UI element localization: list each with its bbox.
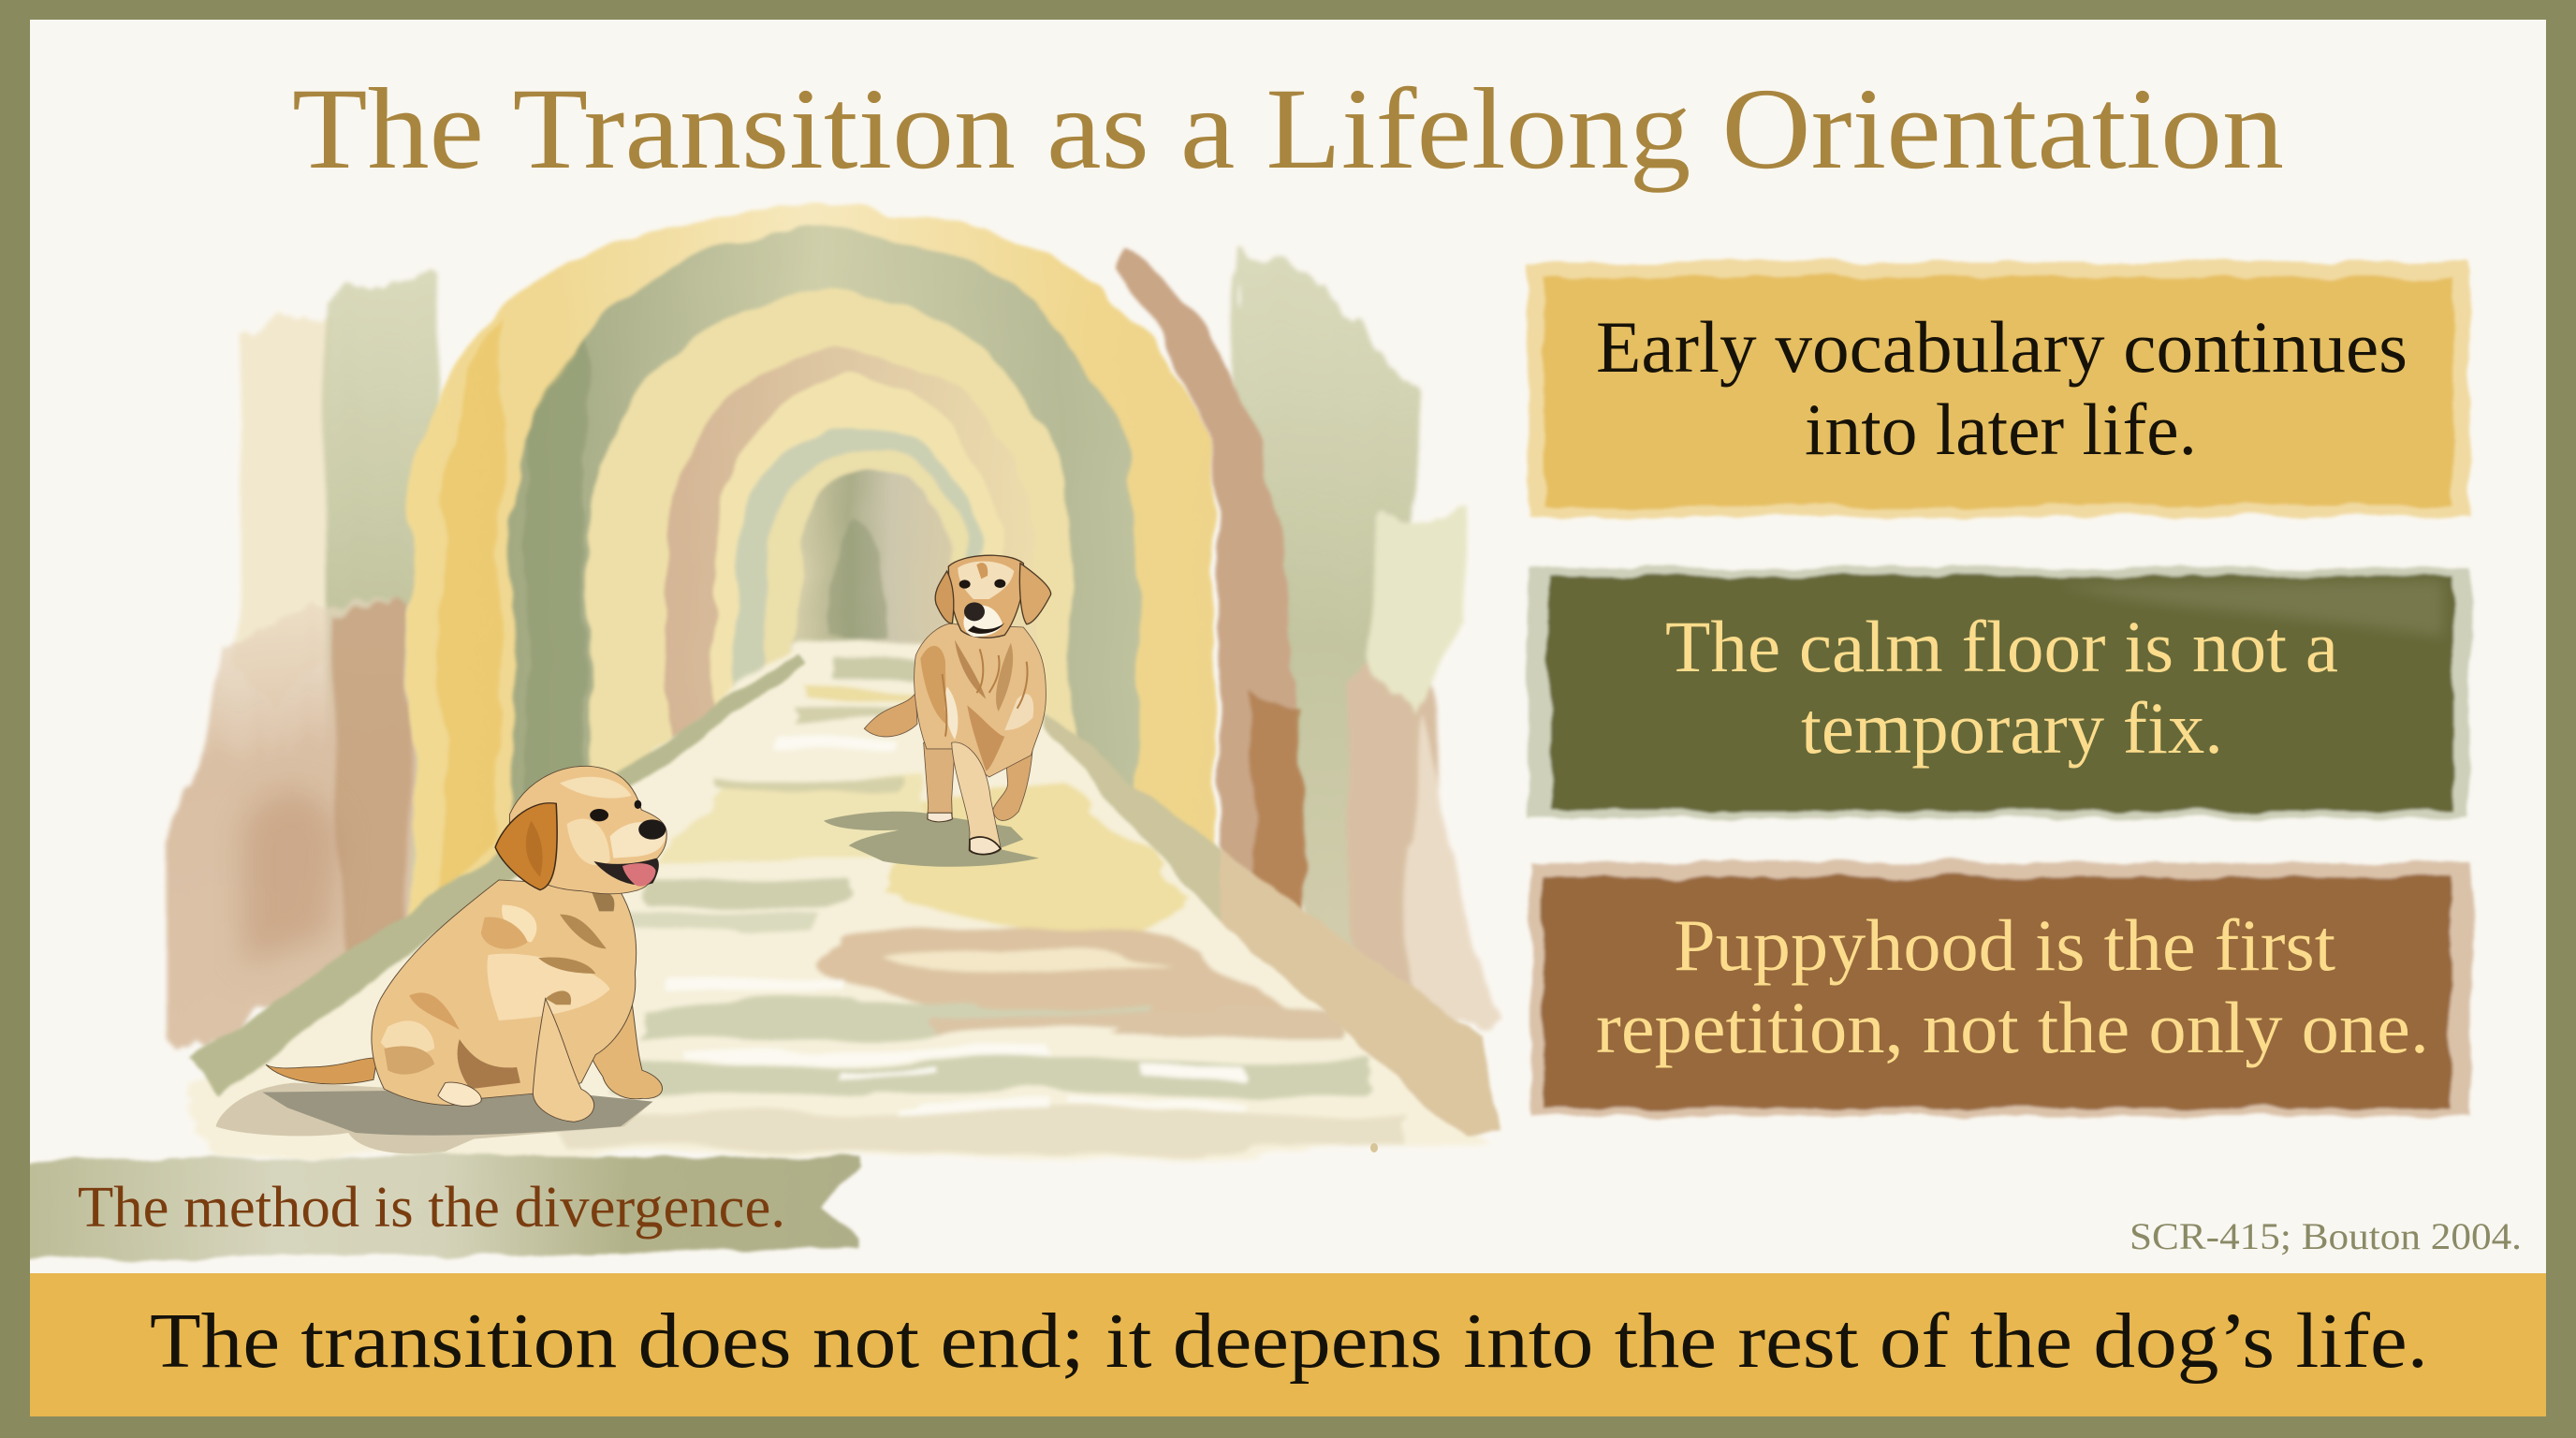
tunnel floor [187, 649, 1488, 1161]
title: The Transition as a Lifelong Orientation [292, 65, 2284, 193]
panel: early vocabulary: Early vocabulary continues [1596, 306, 2408, 388]
panel: early vocabulary [1528, 262, 2469, 517]
nested tunnel arches [409, 207, 1215, 922]
panel: puppyhood: Puppyhood is the first [1674, 904, 2335, 986]
panel: puppyhood: repetition, not the only one. [1596, 987, 2429, 1068]
panel: calm floor [1528, 567, 2469, 818]
mottled brown bloom on left wall [243, 790, 342, 964]
panel: puppyhood [1531, 863, 2471, 1116]
panel: early vocabulary: into later life. [1805, 389, 2197, 470]
bottom takeaway banner: The transition does not end; it deepens into the rest of the dog’s life. [150, 1298, 2428, 1385]
wall base strips [187, 653, 1498, 1137]
golden retriever puppy [216, 766, 666, 1153]
panel: calm floor: The calm floor is not a [1665, 606, 2338, 687]
adult golden retriever [824, 555, 1051, 867]
tunnel outer side washes [167, 253, 1498, 1053]
panel: calm floor: temporary fix. [1801, 687, 2223, 769]
right brown arch [1109, 245, 1305, 936]
source citation: SCR-415; Bouton 2004. [2130, 1215, 2522, 1257]
paint speck [1370, 1143, 1378, 1152]
ribbon: method callout: The method is the divergence. [78, 1176, 785, 1240]
illustration: watercolor tunnel with two dogs [167, 207, 1498, 1161]
ribbon: method callout [23, 1155, 860, 1259]
bottom takeaway banner [30, 1273, 2546, 1416]
